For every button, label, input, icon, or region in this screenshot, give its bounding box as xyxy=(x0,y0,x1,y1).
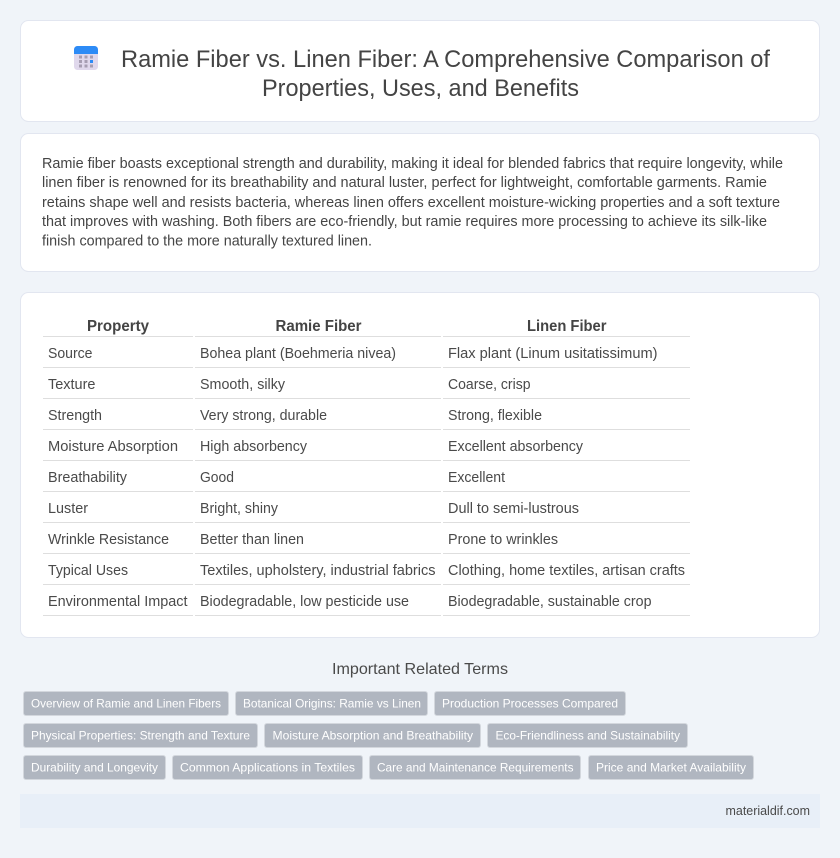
table row: moisture absorption: Excellent absorbency xyxy=(448,439,584,455)
tag xyxy=(236,692,428,716)
table row: luster: Luster xyxy=(48,501,88,517)
tag xyxy=(588,756,754,780)
table row: wrinkle resistance: Better than linen xyxy=(200,532,304,548)
table row: moisture absorption: High absorbency xyxy=(200,439,308,455)
table row: source: Bohea plant (Boehmeria nivea) xyxy=(200,346,396,362)
table row: environmental impact: Environmental Impact xyxy=(48,594,188,610)
tag: Moisture Absorption and Breathability xyxy=(272,728,473,742)
text block: summary paragraph: retains shape well and resists bacteria, whereas linen offers excellent moisture-wicking properties and a soft texture xyxy=(42,195,780,211)
table row: wrinkle resistance: Wrinkle Resistance xyxy=(48,532,169,548)
heading: important related terms: Important Related Terms xyxy=(332,661,508,678)
table row: luster: Bright, shiny xyxy=(200,501,279,517)
table row: typical uses xyxy=(48,563,685,579)
text block: summary paragraph xyxy=(42,156,783,250)
tags: related terms xyxy=(24,692,754,780)
tag: Eco-Friendliness and Sustainability xyxy=(496,728,680,742)
tag xyxy=(370,756,580,780)
table row: luster: Dull to semi-lustrous xyxy=(448,501,579,517)
table row: breathability: Excellent xyxy=(448,470,505,486)
title: Properties, Uses, and Benefits xyxy=(262,75,579,102)
table row: moisture absorption: Moisture Absorption xyxy=(48,439,178,455)
table header xyxy=(87,318,606,335)
panel: header xyxy=(20,20,820,122)
table row: typical uses: Textiles, upholstery, industrial fabrics xyxy=(200,563,436,579)
table row: texture: Coarse, crisp xyxy=(448,377,530,393)
table row: source: Source xyxy=(48,346,92,362)
tag: Production Processes Compared xyxy=(442,696,618,710)
tag: Durability and Longevity xyxy=(31,760,158,774)
tag xyxy=(264,724,480,748)
tag: Common Applications in Textiles xyxy=(180,760,355,774)
table header: Linen Fiber xyxy=(527,318,606,335)
table row: luster xyxy=(48,501,579,517)
tag xyxy=(488,724,688,748)
table row: texture xyxy=(48,377,530,393)
tag xyxy=(434,692,626,716)
table header: Property xyxy=(87,318,149,335)
tag xyxy=(24,756,166,780)
title xyxy=(121,46,770,102)
text block: summary paragraph: that improves with washing. Both fibers are eco-friendly, but ramie requires more processing to achieve its silk-like xyxy=(42,214,767,230)
table row: environmental impact xyxy=(48,594,652,610)
text block: summary paragraph: linen fiber is renowned for its breathability and natural luster, perfect for lightweight, comfortable garments. Ramie xyxy=(42,175,767,191)
panel: description xyxy=(20,134,820,272)
table row: breathability: Good xyxy=(200,470,234,486)
table row: breathability: Breathability xyxy=(48,470,128,486)
table row: wrinkle resistance xyxy=(48,532,558,548)
table row: typical uses: Typical Uses xyxy=(48,563,128,579)
text block: summary paragraph: Ramie fiber boasts exceptional strength and durability, making it ideal for blended fabrics that require longevity, while xyxy=(42,156,783,172)
panel: comparison table xyxy=(20,292,820,638)
table row: texture: Smooth, silky xyxy=(200,377,286,393)
table row: strength: Strong, flexible xyxy=(448,408,542,424)
footer xyxy=(20,794,820,828)
title: Ramie Fiber vs. Linen Fiber: A Comprehensive Comparison of xyxy=(121,46,770,73)
tag xyxy=(24,692,228,716)
table row: environmental impact: Biodegradable, low pesticide use xyxy=(200,594,409,610)
table row: breathability xyxy=(48,470,505,486)
tag: Care and Maintenance Requirements xyxy=(377,760,574,774)
tag: Price and Market Availability xyxy=(596,760,746,774)
tag: Botanical Origins: Ramie vs Linen xyxy=(243,696,421,710)
table row: strength xyxy=(48,408,542,424)
footer text: site name: materialdif.com xyxy=(726,803,810,818)
table row: texture: Texture xyxy=(48,377,96,393)
table row: strength: Strength xyxy=(48,408,102,424)
table row: source: Flax plant (Linum usitatissimum) xyxy=(448,346,658,362)
tag: Overview of Ramie and Linen Fibers xyxy=(31,696,221,710)
table row: moisture absorption xyxy=(48,439,584,455)
text block: summary paragraph: finish compared to the more naturally textured linen. xyxy=(42,234,372,250)
table row: source xyxy=(48,346,658,362)
table row: wrinkle resistance: Prone to wrinkles xyxy=(448,532,558,548)
tag: Physical Properties: Strength and Texture xyxy=(31,728,250,742)
tag xyxy=(172,756,362,780)
table row: strength: Very strong, durable xyxy=(200,408,327,424)
icon: calendar xyxy=(74,46,98,70)
table header: Ramie Fiber xyxy=(276,318,362,335)
table row: environmental impact: Biodegradable, sustainable crop xyxy=(448,594,652,610)
tag xyxy=(24,724,258,748)
table row: typical uses: Clothing, home textiles, artisan crafts xyxy=(448,563,685,579)
